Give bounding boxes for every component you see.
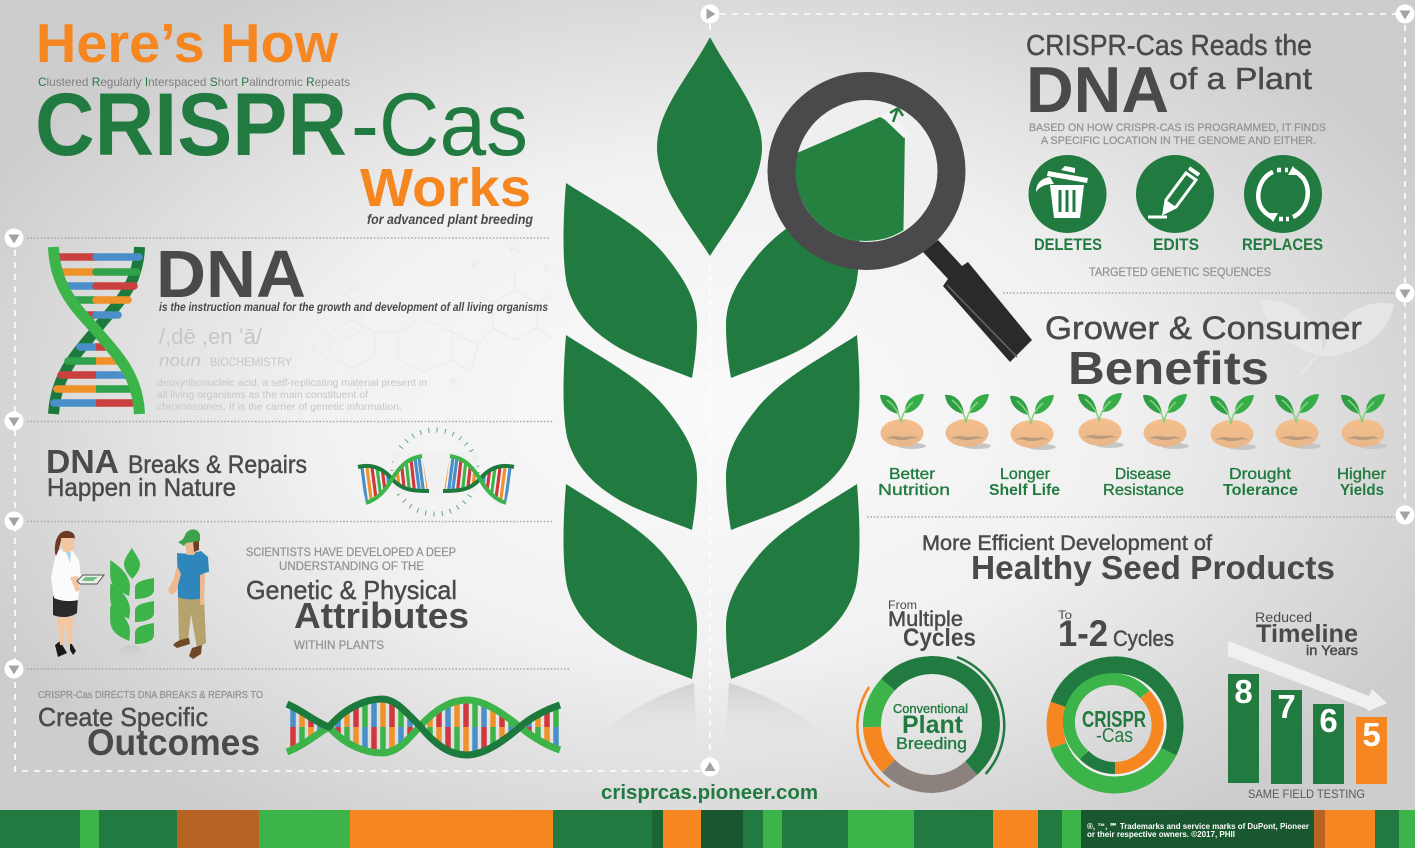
heading — [1026, 30, 1312, 126]
text: scientists understanding: SCIENTISTS HAVE DEVELOPED A DEEP — [246, 547, 456, 559]
panel: DNA breaks and repairs — [46, 430, 514, 514]
label: CRISPR-Cas: CRISPR — [1082, 706, 1146, 732]
heading: Breaks & Repairs — [128, 451, 307, 479]
label: deletes: DELETES — [1034, 235, 1102, 254]
chart: conventional breeding ring — [857, 657, 1004, 787]
icon: long DNA helix — [287, 695, 560, 760]
heading: DNA — [46, 443, 119, 480]
label: to 1-2 cycles — [1058, 608, 1174, 654]
chemical structure watermark: R₆ — [356, 384, 367, 395]
category: BIOCHEMISTRY — [210, 355, 292, 369]
text: scientists understanding: UNDERSTANDING OF THE — [279, 561, 424, 573]
icon: replaces arrows — [1244, 155, 1322, 233]
top leaf — [657, 37, 762, 256]
label: CRISPR-Cas: -Cas — [1096, 725, 1133, 747]
icon: edits pencil — [1136, 155, 1214, 233]
lower left leaf — [564, 484, 697, 679]
label: disease resistance — [1103, 466, 1184, 499]
label: drought tolerance: Tolerance — [1223, 482, 1298, 499]
text: specific outcomes: CRISPR-Cas DIRECTS DNA BREAKS & REPAIRS TO — [38, 689, 263, 701]
chemical structure watermark — [312, 244, 555, 395]
heading: Healthy Seed Products — [971, 549, 1335, 586]
icon: farmer — [168, 529, 209, 659]
subtitle: for advanced plant breeding — [367, 211, 533, 227]
website url: crisprcas.pioneer.com — [601, 782, 818, 804]
arrow: downward trend — [1228, 641, 1387, 711]
chemical structure watermark: R₃ — [544, 264, 555, 275]
chemical structure watermark: R₂ — [471, 262, 482, 273]
text: scientists understanding: WITHIN PLANTS — [294, 638, 384, 652]
caption: targeted genetic sequences: TARGETED GENETIC SEQUENCES — [1089, 265, 1271, 279]
heading: Happen in Nature — [47, 474, 236, 502]
label: better nutrition: Better — [889, 466, 936, 483]
bar: 7 years: 7 — [1277, 688, 1296, 725]
heading — [46, 443, 307, 502]
label: higher yields: Higher — [1337, 466, 1387, 483]
footer legal text — [1087, 822, 1309, 839]
heading: CRISPR-Cas Reads the — [1026, 30, 1312, 62]
pronunciation: /,dē ,en ’ā/ — [159, 324, 263, 349]
icons: seed sprouts — [880, 393, 1387, 450]
icon: magnifying glass — [782, 86, 1032, 362]
label: from multiple cycles: From — [888, 598, 917, 612]
label: replaces: REPLACES — [1242, 235, 1323, 254]
label: conventional plant breeding: Plant — [902, 711, 964, 739]
bar: 6 years — [1313, 702, 1344, 784]
bar chart: timeline — [1228, 673, 1387, 784]
heading: DNA: DNA — [156, 237, 306, 312]
icon: small green plant — [110, 548, 154, 644]
icon: large DNA helix — [54, 247, 140, 414]
chemical structure watermark: R₄ — [350, 284, 361, 295]
label: reduced timeline in years: Timeline — [1256, 620, 1358, 648]
text: scientists understanding: Attributes — [294, 595, 469, 636]
dictionary definition: all living organisms as the main constituent of — [157, 389, 368, 401]
heading: More Efficient Development of — [922, 532, 1212, 555]
label: higher yields — [1337, 466, 1387, 499]
label: CRISPR-Cas — [1082, 706, 1146, 747]
footer legal text: ®, ™, ℠ Trademarks and service marks of DuPont, Pioneer — [1087, 822, 1309, 831]
label: reduced timeline in years: Reduced — [1255, 609, 1312, 625]
label: longer shelf life: Longer — [1000, 466, 1051, 483]
central plant — [564, 37, 860, 679]
part of speech: noun — [159, 351, 201, 370]
label: to 1-2 cycles: 1-2 — [1058, 613, 1108, 654]
panel: genetic and physical attributes — [51, 529, 469, 668]
description: A SPECIFIC LOCATION IN THE GENOME AND EITHER. — [1041, 135, 1316, 147]
heading — [922, 532, 1335, 586]
label: drought tolerance: Drought — [1229, 466, 1292, 483]
middle right leaf — [726, 335, 860, 530]
heading: of a Plant — [1169, 61, 1312, 96]
label: reduced timeline in years — [1255, 609, 1358, 658]
bar: 6 years: 6 — [1319, 702, 1338, 739]
label: reduced timeline in years: in Years — [1306, 642, 1358, 658]
panel: create specific outcomes — [38, 689, 560, 763]
label: disease resistance: Resistance — [1103, 482, 1184, 499]
upper left leaf — [564, 183, 697, 378]
label: from multiple cycles — [888, 598, 976, 652]
panel: DNA definition — [156, 237, 548, 413]
heading: -Cas: -Cas — [351, 74, 528, 174]
description — [1029, 122, 1326, 147]
label: from multiple cycles: Multiple — [888, 608, 963, 631]
heading: DNA — [1026, 53, 1169, 126]
footer legal text: or their respective owners. ©2017, PHII — [1087, 830, 1235, 839]
upper right leaf — [726, 183, 860, 378]
text: specific outcomes: Outcomes — [87, 722, 260, 763]
label: to 1-2 cycles: Cycles — [1113, 626, 1174, 651]
label: from multiple cycles: Cycles — [903, 624, 976, 652]
text: scientists understanding — [246, 547, 469, 652]
label: longer shelf life: Shelf Life — [989, 482, 1060, 499]
label: edits: EDITS — [1153, 235, 1199, 254]
heading: CRISPR: CRISPR — [35, 74, 347, 174]
heading: Here's How: Here’s How — [36, 12, 338, 74]
bar: 5 years — [1356, 716, 1387, 784]
icon: broken DNA — [358, 430, 514, 514]
heading: Works: Works — [360, 158, 531, 218]
description: BASED ON HOW CRISPR-CAS IS PROGRAMMED, IT FINDS — [1029, 122, 1326, 134]
label: drought tolerance — [1223, 466, 1298, 499]
label: higher yields: Yields — [1340, 482, 1384, 499]
dictionary definition: deoxyribonucleic acid, a self-replicating material present in — [157, 377, 427, 389]
dictionary definition — [157, 377, 427, 413]
bar: 8 years — [1228, 673, 1259, 783]
heading: Benefits — [1068, 342, 1269, 394]
title — [35, 12, 533, 227]
heading — [1045, 310, 1362, 394]
panel: CRISPR-Cas reads DNA — [1026, 30, 1326, 279]
middle left leaf — [564, 335, 697, 530]
panel: grower and consumer benefits — [878, 301, 1393, 499]
plant reflection — [110, 645, 154, 668]
panel: healthy seed products — [857, 532, 1387, 801]
DNA description: is the instruction manual for the growth and development of all living organisms — [159, 302, 548, 314]
chemical structure watermark: R₁ — [510, 244, 521, 255]
chart: CRISPR-Cas ring — [1055, 665, 1175, 785]
bar: 5 years: 5 — [1362, 716, 1381, 753]
icon: scientist — [51, 531, 104, 657]
label: disease resistance: Disease — [1115, 466, 1171, 483]
label: longer shelf life — [989, 466, 1060, 499]
dictionary definition: chromosomes. It is the carrier of genetic information. — [157, 401, 402, 413]
caption: same field testing: SAME FIELD TESTING — [1248, 787, 1365, 801]
icon: deletes trash can — [1028, 155, 1106, 233]
text: specific outcomes — [38, 689, 263, 763]
text: scientists understanding: Genetic & Physical — [246, 575, 457, 605]
label: conventional plant breeding: Conventional — [893, 701, 968, 716]
label: to 1-2 cycles: To — [1058, 608, 1072, 622]
acronym expansion: Clustered Regularly Interspaced Short Palindromic Repeats — [38, 75, 350, 89]
leaf watermark — [1262, 301, 1393, 375]
heading: Grower & Consumer — [1045, 310, 1362, 346]
bar: 7 years — [1271, 688, 1302, 784]
chemical structure watermark: R₇ — [450, 377, 461, 388]
plant reflection shadow — [590, 683, 834, 748]
footer colour band — [0, 810, 1415, 848]
label: better nutrition — [878, 466, 950, 499]
text: specific outcomes: Create Specific — [38, 702, 208, 732]
bar: 8 years: 8 — [1234, 673, 1253, 710]
label: conventional plant breeding — [893, 701, 968, 753]
label: better nutrition: Nutrition — [878, 482, 950, 499]
lower right leaf — [726, 484, 860, 679]
label: conventional plant breeding: Breeding — [896, 734, 967, 753]
chemical structure watermark: R₅ — [312, 344, 323, 355]
